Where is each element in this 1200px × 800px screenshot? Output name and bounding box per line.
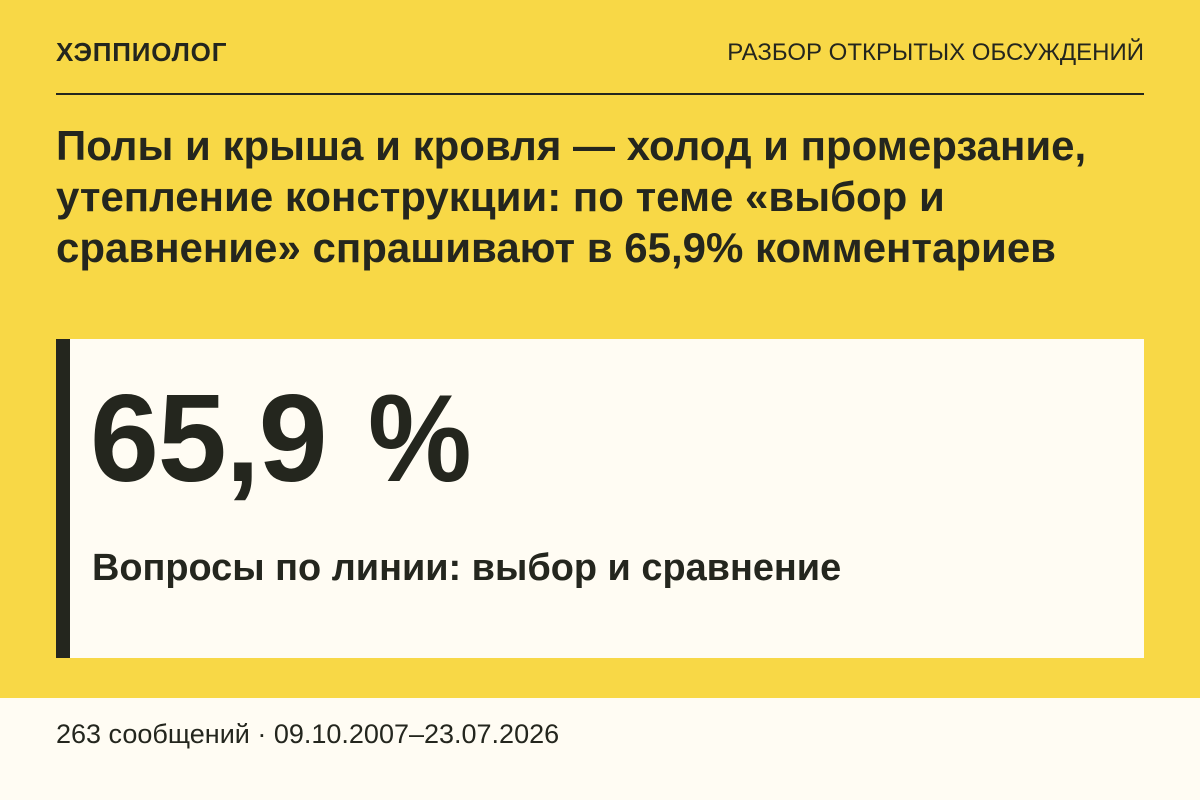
header caption: РАЗБОР ОТКРЫТЫХ ОБСУЖДЕНИЙ	[727, 39, 1144, 66]
title: Полы и крыша и кровля — холод и промерзание,	[56, 122, 1086, 169]
footer text: 263 сообщений · 09.10.2007–23.07.2026	[56, 719, 559, 749]
panel: key figure	[56, 339, 1144, 658]
brand name: ХЭППИОЛОГ	[56, 37, 227, 67]
big number: %	[368, 370, 470, 508]
title: сравнение» спрашивают в 65,9% комментариев	[56, 224, 1056, 271]
big number: 65,9	[90, 370, 326, 508]
big number	[90, 370, 470, 508]
panel accent bar	[56, 339, 70, 658]
title: утепление конструкции: по теме «выбор и	[56, 173, 945, 220]
footer band	[0, 698, 1200, 800]
title	[56, 122, 1086, 271]
figure label: Вопросы по линии: выбор и сравнение	[92, 547, 841, 589]
